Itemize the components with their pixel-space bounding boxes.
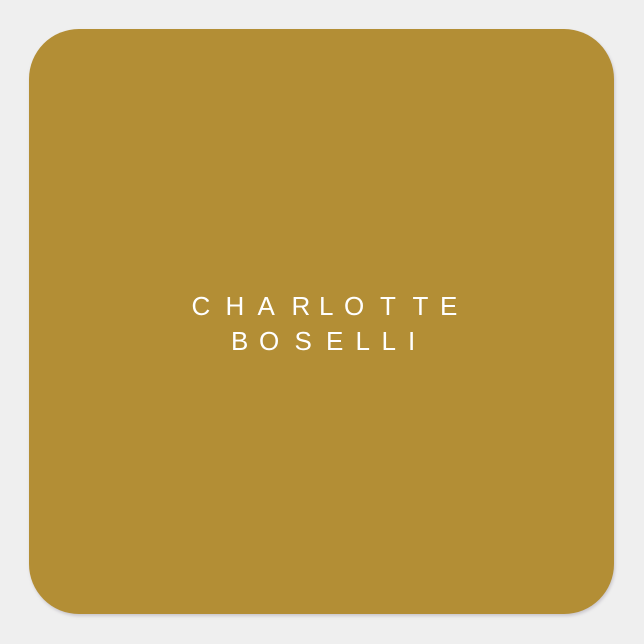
title: name bbox=[192, 291, 457, 356]
title: name: BOSELLI bbox=[231, 326, 415, 356]
title: name: CHARLOTTE bbox=[192, 291, 457, 321]
